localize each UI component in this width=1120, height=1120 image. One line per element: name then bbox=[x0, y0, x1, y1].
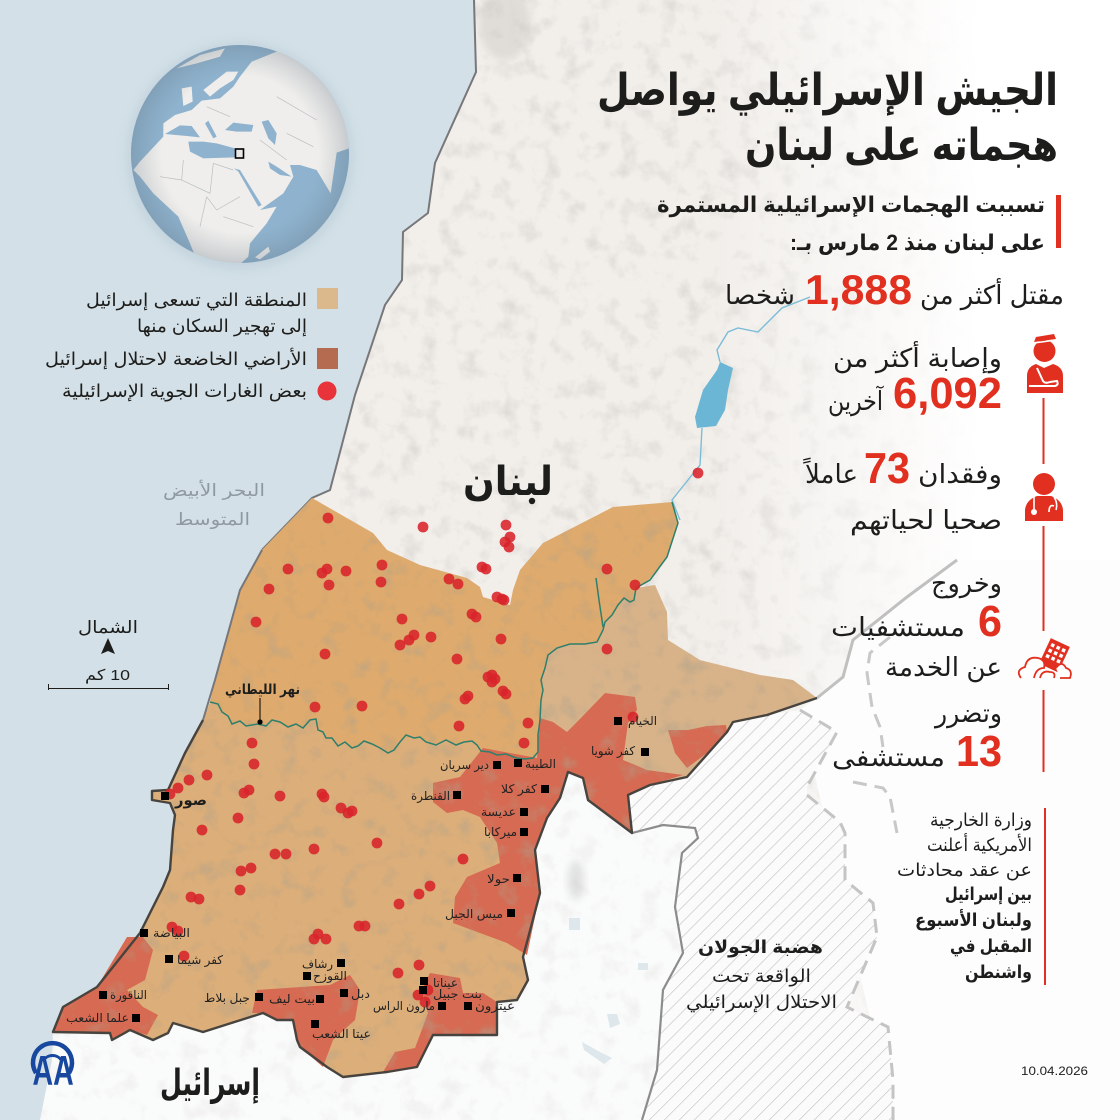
note: US talks: ولبنان الأسبوع bbox=[915, 909, 1032, 931]
legend: air strikes: بعض الغارات الجوية الإسرائيلية bbox=[62, 381, 307, 402]
place markers and names: بيت ليف bbox=[269, 992, 315, 1006]
stat: injured bbox=[828, 340, 1002, 418]
legend: displacement area: المنطقة التي تسعى إسرائيل bbox=[86, 290, 307, 311]
icon: injured person bbox=[1027, 334, 1063, 393]
Litani river label: نهر الليطاني bbox=[225, 681, 300, 698]
place markers and names: البياضة bbox=[153, 926, 190, 940]
Litani river bbox=[210, 502, 678, 759]
note: US talks: واشنطن bbox=[965, 962, 1032, 983]
stat: hospitals damaged: وتضرر bbox=[933, 698, 1002, 729]
place markers and names: كفر كلا bbox=[501, 782, 537, 797]
Israel area bbox=[40, 770, 700, 1120]
north arrow and scale bbox=[48, 618, 168, 690]
subtitle bbox=[657, 192, 1061, 255]
label: Israel: إسرائيل bbox=[160, 1062, 260, 1104]
place markers and names: القوزح bbox=[313, 969, 347, 984]
place markers and names: الخيام bbox=[628, 714, 657, 728]
label: Golan Heights bbox=[686, 937, 837, 1013]
Golan Heights hatched zone bbox=[628, 637, 897, 1120]
stat: hospitals out of service: عن الخدمة bbox=[885, 652, 1002, 683]
place markers and names: الطيبة bbox=[525, 757, 556, 771]
stat: killed: مقتل أكثر من bbox=[920, 277, 1064, 311]
stat: health workers: وفقدان bbox=[918, 459, 1002, 490]
place markers and names: جبل بلاط bbox=[204, 991, 250, 1005]
air strikes dots bbox=[165, 468, 703, 1007]
icon: damaged building bbox=[1019, 638, 1071, 678]
land base map bbox=[208, 0, 1120, 1016]
upper river bbox=[672, 297, 810, 520]
zone: south of Litani bbox=[53, 702, 568, 1077]
legend bbox=[45, 288, 338, 402]
place markers and names: مارون الراس bbox=[373, 999, 435, 1014]
locator box bbox=[236, 149, 244, 158]
Litani river label bbox=[225, 681, 300, 725]
place markers and names: حولا bbox=[487, 872, 510, 887]
stat: killed: 1,888 bbox=[805, 266, 912, 313]
label: Golan Heights: هضبة الجولان bbox=[698, 937, 823, 958]
grey border line: Syria bbox=[817, 560, 957, 698]
zone: north of Litani (displacement area) bbox=[210, 498, 678, 759]
north arrow and scale: 10 كم bbox=[85, 667, 130, 684]
stat: hospitals damaged bbox=[832, 698, 1002, 776]
stat: health workers: صحيا لحياتهم bbox=[850, 505, 1002, 536]
note: US talks: المقبل في bbox=[950, 936, 1032, 957]
map relief texture bbox=[50, 495, 820, 1085]
place markers and names: ميس الجبل bbox=[445, 907, 503, 922]
stat: health workers: عاملاً bbox=[802, 457, 858, 489]
place markers and names bbox=[66, 714, 657, 1041]
stat: injured: وإصابة أكثر من bbox=[833, 340, 1002, 374]
stat: hospitals out of service: وخروج bbox=[931, 568, 1002, 599]
place markers and names: كفر شيما bbox=[177, 953, 223, 968]
place markers and names: رشاف bbox=[302, 957, 333, 972]
note: US talks bbox=[897, 808, 1045, 985]
zone: south-east bbox=[533, 585, 817, 833]
stat: hospitals out of service: 6 bbox=[978, 597, 1002, 646]
place markers and names: عيترون bbox=[475, 999, 515, 1014]
note: US talks: بين إسرائيل bbox=[945, 884, 1032, 905]
place markers and names: الناقورة bbox=[110, 988, 147, 1003]
stat: injured: آخرين bbox=[828, 385, 885, 417]
place markers and names: علما الشعب bbox=[66, 1011, 129, 1025]
label: Lebanon: لبنان bbox=[463, 460, 553, 504]
occupied zones bbox=[53, 693, 727, 1072]
stat: killed: شخصا bbox=[725, 280, 795, 310]
north arrow and scale: الشمال bbox=[78, 618, 138, 637]
place markers and names: عديسة bbox=[481, 805, 516, 819]
stat: hospitals damaged: مستشفى bbox=[832, 742, 945, 772]
connector line bbox=[1042, 690, 1044, 772]
subtitle: تسببت الهجمات الإسرائيلية المستمرة bbox=[657, 192, 1045, 218]
label: Mediterranean Sea: البحر الأبيض bbox=[163, 480, 265, 500]
stat: hospitals out of service bbox=[831, 568, 1002, 683]
note: US talks: عن عقد محادثات bbox=[897, 860, 1032, 881]
place markers and names: عيتا الشعب bbox=[312, 1027, 371, 1041]
stat: hospitals out of service: مستشفيات bbox=[831, 612, 965, 642]
place markers and names: كفر شويا bbox=[591, 744, 635, 759]
place markers and names: عيناتا bbox=[433, 976, 458, 990]
place markers and names: بنت جبيل bbox=[433, 987, 482, 1001]
legend: displacement area bbox=[86, 288, 338, 337]
logo: AA: AA bbox=[32, 1048, 74, 1094]
place markers and names: صور bbox=[174, 792, 207, 809]
legend: occupied land: الأراضي الخاضعة لاحتلال إسرائيل bbox=[45, 348, 307, 370]
title bbox=[597, 66, 1058, 170]
Syria side area bbox=[800, 560, 1120, 1120]
label: Golan Heights: الاحتلال الإسرائيلي bbox=[686, 992, 837, 1013]
Israeli border line bbox=[53, 698, 817, 1077]
stat: killed bbox=[725, 266, 1064, 313]
note: US talks: الأمريكية أعلنت bbox=[927, 833, 1032, 856]
place markers and names: ميركابا bbox=[484, 825, 517, 840]
label: Mediterranean Sea bbox=[163, 480, 265, 529]
globe locator bbox=[127, 43, 363, 270]
connector line bbox=[1042, 526, 1044, 631]
place markers and names: دبل bbox=[351, 987, 370, 1001]
stat: injured: 6,092 bbox=[893, 369, 1002, 418]
note: US talks: وزارة الخارجية bbox=[930, 810, 1032, 831]
subtitle: على لبنان منذ 2 مارس بـ: bbox=[790, 230, 1045, 255]
lake Qaraoun bbox=[695, 362, 733, 428]
label: Mediterranean Sea: المتوسط bbox=[175, 510, 250, 529]
date: 10.04.2026 bbox=[1021, 1064, 1088, 1078]
stat: health workers bbox=[802, 444, 1002, 536]
place markers and names: القنطرة bbox=[411, 789, 450, 804]
label: Golan Heights: الواقعة تحت bbox=[712, 966, 811, 987]
stat: hospitals damaged: 13 bbox=[956, 727, 1002, 776]
stat: health workers: 73 bbox=[864, 444, 910, 493]
connector line bbox=[1042, 398, 1044, 464]
place markers and names: دير سريان bbox=[440, 758, 489, 773]
icon: doctor bbox=[1025, 473, 1063, 521]
title: هجماته على لبنان bbox=[745, 121, 1058, 170]
legend: displacement area: إلى تهجير السكان منها bbox=[137, 316, 307, 337]
